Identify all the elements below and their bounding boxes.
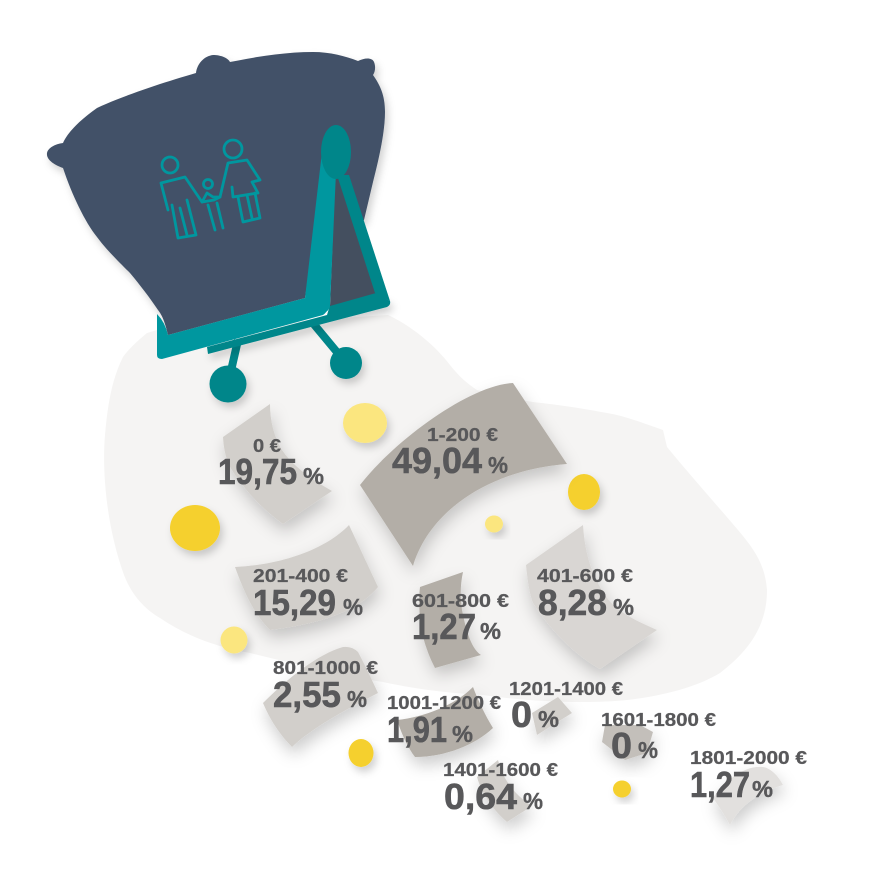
- bag: [47, 52, 385, 335]
- label: 1401-1600 euro: %: [523, 788, 543, 814]
- coin: yellow upper right: [568, 474, 600, 510]
- bill: 401-600 euro: [526, 525, 657, 669]
- label: 201-400 euro: %: [343, 594, 363, 620]
- label: 201-400 euro: 201-400 €: [253, 566, 348, 586]
- label: 1401-1600 euro: 0,64: [444, 776, 517, 817]
- coin: small pale: [485, 516, 503, 532]
- label: 1001-1200 euro: [387, 693, 501, 750]
- label: 801-1000 euro: 2,55: [273, 674, 341, 715]
- label: 1201-1400 euro: 1201-1400 €: [509, 679, 623, 699]
- label: 1801-2000 euro: %: [752, 776, 773, 802]
- label: 0 euro: %: [303, 463, 324, 489]
- label: 1401-1600 euro: 1401-1600 €: [443, 760, 558, 780]
- label: 401-600 euro: 401-600 €: [537, 566, 633, 586]
- label: 1601-1800 euro: 0: [611, 725, 632, 766]
- label: 1801-2000 euro: 1801-2000 €: [690, 748, 807, 768]
- label: 401-600 euro: 8,28: [538, 582, 607, 623]
- cart handle strut: [305, 152, 336, 314]
- label: 0 euro: 0 €: [253, 436, 281, 456]
- label: 1-200 euro: [392, 425, 508, 481]
- bill: 801-1000 euro: [263, 647, 378, 747]
- background blob: [104, 315, 767, 702]
- label: 1801-2000 euro: [690, 748, 807, 805]
- label: 0 euro: 19,75: [218, 451, 297, 492]
- cart wheel right: [330, 347, 362, 379]
- label: 1201-1400 euro: 0: [511, 694, 532, 735]
- cart right strap: [337, 175, 390, 301]
- bill: 1-200 euro: [360, 383, 567, 566]
- bill: 1801-2000 euro: [713, 767, 783, 825]
- label: 201-400 euro: [253, 566, 363, 623]
- label: 201-400 euro: 15,29: [253, 582, 336, 623]
- label: 0 euro: [218, 436, 324, 492]
- label: 1601-1800 euro: 1601-1800 €: [601, 710, 716, 730]
- label: 601-800 euro: %: [480, 618, 501, 644]
- bill: 1201-1400 euro: [532, 697, 572, 735]
- label: 801-1000 euro: %: [347, 686, 367, 712]
- label: 1-200 euro: %: [488, 452, 508, 478]
- icon: family: [161, 140, 260, 238]
- label: 1401-1600 euro: [443, 760, 558, 817]
- label: 1801-2000 euro: 1,27: [690, 764, 750, 805]
- bill: 201-400 euro: [235, 525, 378, 630]
- cart front panel: [157, 298, 327, 359]
- cart legs: [228, 322, 346, 384]
- label: 1-200 euro: 49,04: [392, 440, 482, 481]
- bill: 601-800 euro: [419, 572, 481, 668]
- label: 601-800 euro: 601-800 €: [412, 591, 509, 611]
- coin: yellow bottom: [348, 739, 374, 767]
- cart inner panel: [330, 178, 376, 306]
- label: 801-1000 euro: [273, 658, 378, 715]
- bill: 1401-1600 euro: [477, 760, 532, 822]
- cart wheel left: [210, 366, 246, 402]
- coin: large pale: [343, 403, 387, 443]
- label: 801-1000 euro: 801-1000 €: [273, 658, 378, 678]
- label: 601-800 euro: 1,27: [412, 606, 476, 647]
- cart lower tray: [207, 292, 390, 354]
- label: 1001-1200 euro: %: [452, 721, 473, 747]
- label: 1601-1800 euro: [601, 710, 716, 766]
- coin: large yellow: [170, 505, 220, 551]
- bill: 0 euro: [223, 404, 332, 524]
- label: 601-800 euro: [412, 591, 509, 647]
- shopping cart and bag: [47, 52, 390, 402]
- label: 1201-1400 euro: %: [538, 706, 559, 732]
- coin: pale left: [220, 626, 248, 654]
- label: 1201-1400 euro: [509, 679, 623, 735]
- label: 401-600 euro: [537, 566, 634, 623]
- bill: 1601-1800 euro: [602, 725, 653, 760]
- label: 401-600 euro: %: [613, 594, 634, 620]
- label: 1601-1800 euro: %: [638, 737, 658, 763]
- label: 1-200 euro: 1-200 €: [427, 425, 498, 445]
- cart handle: [321, 125, 351, 179]
- label: 1001-1200 euro: 1001-1200 €: [387, 693, 501, 713]
- bill: 1001-1200 euro: [397, 687, 493, 757]
- coin: small yellow: [613, 780, 631, 798]
- label: 1001-1200 euro: 1,91: [387, 709, 447, 750]
